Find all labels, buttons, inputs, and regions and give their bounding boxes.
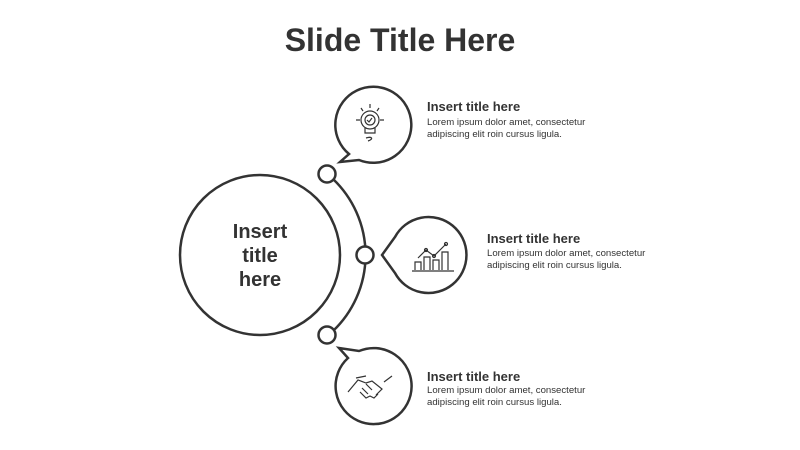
central circle: [180, 175, 340, 335]
bubble 1: [335, 87, 411, 163]
text: Insert title here: [487, 231, 580, 246]
central circle: title: [242, 245, 278, 267]
text block 2: [487, 231, 646, 271]
bubble 3: [336, 348, 412, 424]
text block 3: [427, 369, 586, 408]
bubble 2: [382, 217, 466, 293]
node circles: [318, 166, 374, 344]
central circle: here: [239, 269, 281, 291]
title: Slide Title Here: [285, 22, 515, 58]
icon: lightbulb: [356, 104, 384, 141]
text: adipiscing elit roin cursus ligula.: [427, 397, 562, 408]
text: Insert title here: [427, 369, 520, 384]
icon: bar chart: [412, 242, 454, 271]
text: adipiscing elit roin cursus ligula.: [487, 260, 622, 271]
central circle: Insert: [233, 221, 288, 243]
text: Lorem ipsum dolor amet, consectetur: [487, 248, 645, 259]
connecting arc: [333, 179, 366, 331]
text: Insert title here: [427, 99, 520, 114]
icon: handshake: [348, 376, 392, 398]
text block 1: [427, 99, 586, 140]
text: Lorem ipsum dolor amet, consectetur: [427, 385, 585, 396]
text: adipiscing elit roin cursus ligula.: [427, 129, 562, 140]
text: Lorem ipsum dolor amet, consectetur: [427, 117, 585, 128]
